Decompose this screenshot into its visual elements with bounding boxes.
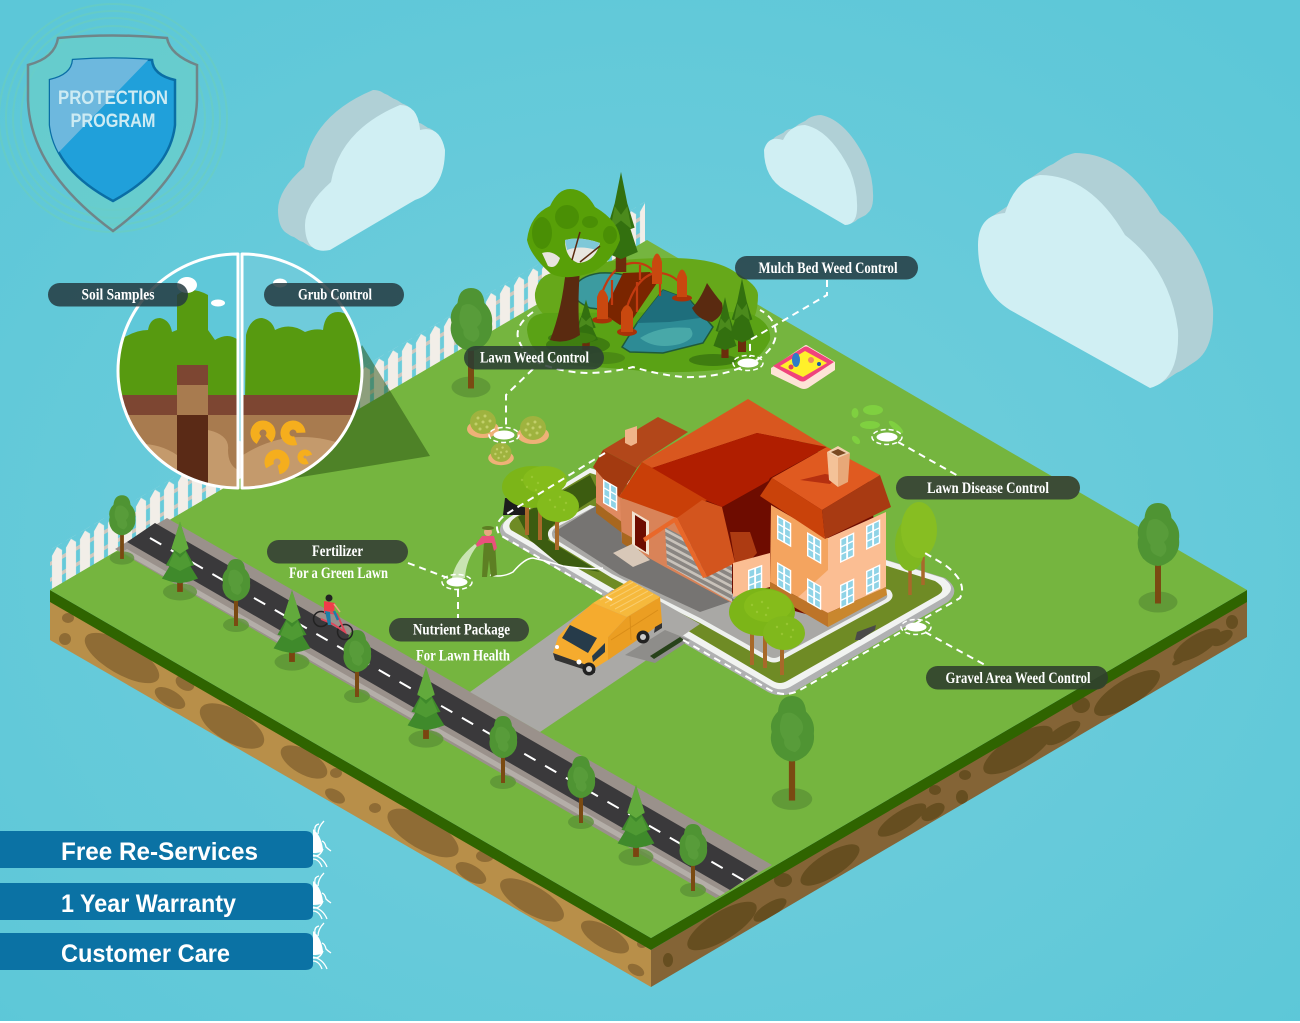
cloud: centre — [764, 115, 873, 225]
water spray — [452, 544, 477, 578]
house: tower roof — [760, 446, 891, 539]
label: Mulch Bed Weed Control: Mulch Bed Weed Control — [758, 260, 898, 277]
connector: lawn disease — [898, 442, 960, 477]
lawn disease patch — [850, 405, 905, 446]
label: Lawn Disease Control: Lawn Disease Control — [927, 480, 1050, 497]
house: tower walls — [748, 505, 887, 627]
shield: protection program badge: PROGRAM — [70, 111, 156, 132]
label: Lawn Disease Control — [896, 476, 1080, 500]
house: central roof — [619, 399, 827, 578]
road with sidewalks — [115, 518, 772, 898]
label: Fertilizer: For a Green Lawn — [289, 565, 388, 582]
connector: gravel area — [925, 632, 985, 665]
shield: protection program badge — [0, 4, 227, 232]
big tree — [527, 189, 620, 344]
label: Nutrient Package: For Lawn Health — [416, 648, 510, 664]
gardener — [476, 526, 497, 577]
sandbox — [771, 345, 835, 389]
house — [593, 399, 891, 640]
benefit bar: Free Re-Services — [0, 821, 331, 868]
hose — [490, 558, 603, 576]
label: Grub Control: Grub Control — [298, 286, 373, 304]
connector: pad ring north-west — [497, 453, 612, 600]
soil block: left side — [50, 600, 651, 987]
lawn trees — [451, 288, 1179, 810]
house pad: lawn and gravel — [500, 468, 954, 695]
fence — [50, 202, 645, 592]
pine trees by the pond — [574, 172, 755, 358]
cyclist — [314, 594, 352, 640]
connector: fertilizer — [408, 563, 448, 578]
van — [553, 580, 662, 676]
cloud: right — [978, 153, 1213, 388]
label: Lawn Weed Control — [464, 346, 604, 370]
magnifier lens: soil samples half — [116, 250, 238, 490]
connector: mulch bed — [750, 280, 827, 357]
house: entry wall and door — [613, 498, 732, 603]
label: Nutrient Package — [389, 618, 529, 664]
label: Gravel Area Weed Control: Gravel Area Weed Control — [946, 670, 1091, 687]
shrubs — [467, 410, 549, 465]
dashed connector lines — [408, 280, 985, 694]
magnifier lens: grub control half — [242, 250, 368, 490]
hot spots — [442, 356, 931, 634]
grass top with rim — [50, 240, 1247, 950]
connector: lawn weed to shrubs — [506, 369, 533, 428]
label: Grub Control — [264, 283, 404, 306]
label: Fertilizer — [267, 540, 408, 582]
benefit bar: Customer Care: Customer Care — [61, 940, 230, 968]
lawn shadow of lens — [295, 345, 430, 478]
label: Soil Samples — [48, 283, 188, 306]
benefit bar: 1 Year Warranty — [0, 873, 331, 920]
tree cluster: house front — [729, 588, 805, 675]
road trees — [109, 495, 707, 897]
connector: nutrient package — [457, 590, 459, 618]
label: Mulch Bed Weed Control — [735, 256, 918, 280]
house: backing shape — [640, 412, 880, 620]
house: garage door — [665, 527, 732, 602]
connector: pad ring south — [683, 553, 962, 694]
bridge — [592, 254, 692, 336]
pond water — [573, 273, 713, 353]
pond garden mound — [527, 258, 770, 372]
connector: lawn weed ring — [518, 310, 776, 377]
house: lower wing wall — [733, 553, 770, 597]
rock — [692, 283, 723, 322]
house: left wing — [593, 417, 688, 533]
benefit bar: Free Re-Services: Free Re-Services — [61, 838, 258, 866]
tree cluster: house left — [502, 466, 579, 550]
tree pair: house right — [895, 502, 937, 595]
cloud: left — [278, 90, 445, 251]
label: Lawn Weed Control: Lawn Weed Control — [480, 350, 590, 366]
driveway — [470, 590, 700, 732]
soil block: right side — [651, 600, 1247, 987]
label: Fertilizer: Fertilizer — [312, 543, 363, 560]
benefit bar: 1 Year Warranty: 1 Year Warranty — [61, 890, 236, 918]
label: Soil Samples: Soil Samples — [82, 286, 154, 304]
label: Nutrient Package: Nutrient Package — [413, 622, 510, 638]
shield: protection program badge: PROTECTION — [58, 88, 168, 109]
label: Gravel Area Weed Control — [926, 666, 1108, 690]
benefit bar: Customer Care — [0, 923, 331, 970]
